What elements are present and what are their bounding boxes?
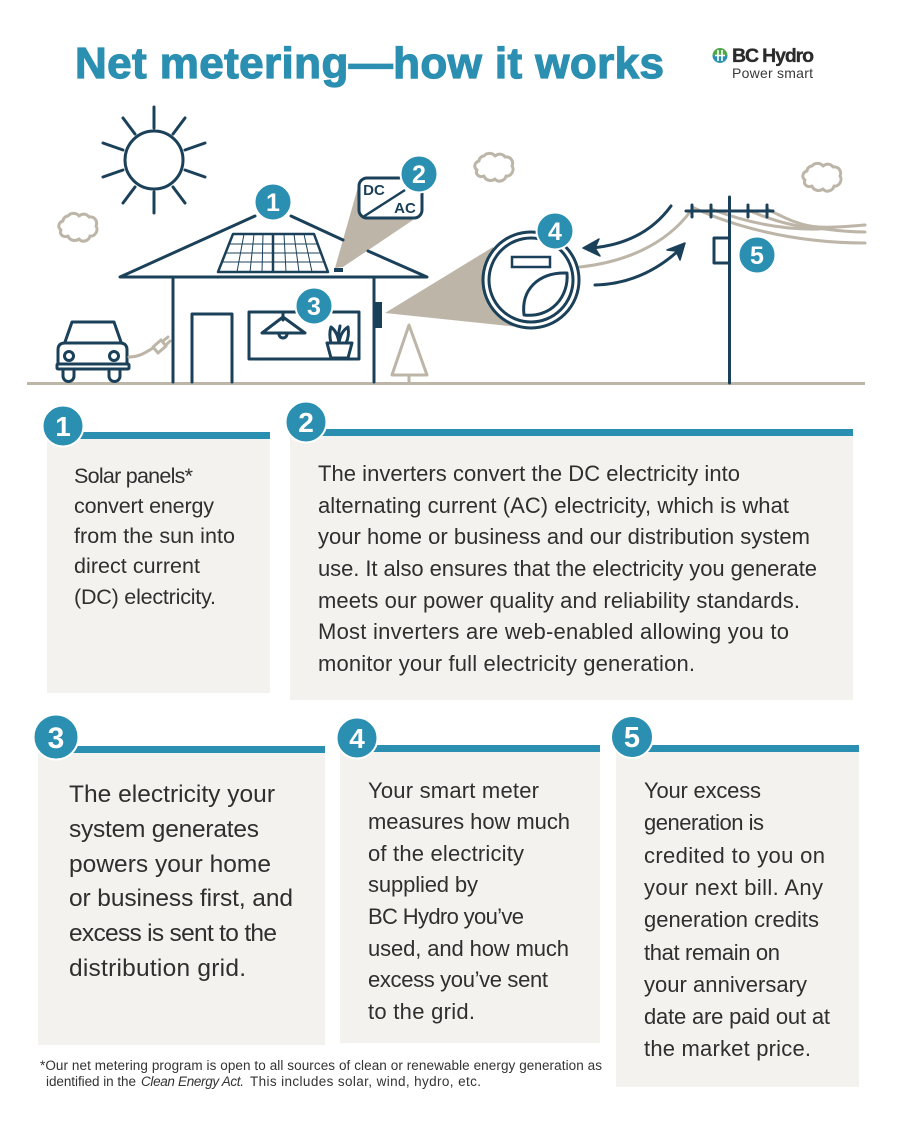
icon: solar panel — [218, 234, 328, 272]
step 2 text: The inverters convert the DC electricity into — [318, 461, 740, 486]
icon: DC to AC inverter: AC — [394, 200, 416, 217]
step 3 text — [69, 781, 293, 982]
step 3 text: distribution grid. — [69, 955, 246, 982]
icon: left cloud — [59, 213, 97, 241]
icon: house — [120, 216, 427, 382]
step 2 text: meets our power quality and reliability standards. — [318, 588, 800, 613]
icon: tree — [392, 325, 427, 383]
step 4 text: of the electricity — [368, 841, 524, 866]
panel: step 3 — [34, 714, 325, 1045]
logo: BC Hydro Power smart — [712, 45, 814, 81]
panel: step 5 — [611, 716, 859, 1087]
step 5 text: the market price. — [644, 1036, 811, 1061]
ground line — [27, 382, 865, 385]
badge 1 — [254, 184, 292, 220]
step 5 text: your anniversary — [644, 972, 807, 997]
step 4 text: excess you’ve sent — [368, 967, 548, 992]
step 2 text: use. It also ensures that the electricity you generate — [318, 556, 817, 581]
icon: rooftop inverter — [334, 268, 343, 272]
step 3 text: powers your home — [69, 851, 271, 878]
icon: charging cable and plug — [129, 337, 170, 357]
icon: beige wire to meter — [580, 212, 690, 267]
step 1 text: convert energy — [74, 494, 214, 518]
panel: step 3: 3 — [48, 722, 64, 755]
badge 2: 2 — [412, 161, 426, 189]
footnote — [40, 1058, 602, 1089]
step 5 text: credited to you on — [644, 843, 825, 868]
badge 2 — [400, 156, 438, 192]
illustration: house, meter and power pole — [27, 107, 865, 384]
icon: DC to AC inverter: DC — [363, 182, 385, 199]
badge 4 — [536, 212, 574, 250]
panel: step 2 — [286, 402, 853, 700]
icon: DC to AC inverter — [359, 178, 422, 218]
footnote: This includes solar, wind, hydro, etc. — [250, 1074, 481, 1089]
icon: sun — [103, 107, 205, 213]
panel: step 4: 4 — [349, 723, 365, 754]
step 3 text: excess is sent to the — [69, 920, 277, 947]
step 2 text — [318, 461, 817, 676]
step 2 text: Most inverters are web-enabled allowing you to — [318, 619, 789, 644]
step 2 text: monitor your full electricity generation. — [318, 651, 695, 676]
step 5 text: that remain on — [644, 940, 780, 965]
badge 3 — [296, 288, 332, 324]
step 3 text: or business first, and — [69, 885, 293, 912]
icon: power pole — [686, 197, 773, 383]
step 4 text: supplied by — [368, 872, 478, 897]
panel: step 2: 2 — [298, 407, 314, 438]
step 4 text: measures how much — [368, 809, 570, 834]
icon: smart meter — [483, 232, 579, 328]
step 1 text — [74, 464, 235, 609]
step 5 text: Your excess — [644, 778, 761, 803]
badge 5: 5 — [750, 242, 764, 270]
arrow: from meter to pole — [595, 243, 685, 285]
step 5 text: date are paid out at — [644, 1004, 830, 1029]
icon: power lines — [692, 207, 865, 243]
logo: BC Hydro Power smart: BC Hydro — [732, 45, 814, 67]
icon: plant — [327, 326, 352, 358]
step 3 text: system generates — [69, 816, 259, 843]
icon: wall-mounted meter box — [374, 302, 382, 328]
step 4 text: to the grid. — [368, 999, 475, 1024]
icon: middle cloud — [475, 153, 513, 181]
panel: step 5: 5 — [624, 722, 640, 754]
step 4 text: used, and how much — [368, 936, 569, 961]
panel: step 4 — [336, 718, 600, 1043]
footnote: identified in the — [46, 1074, 136, 1089]
icon: lamp — [262, 312, 305, 338]
step 5 text — [644, 778, 830, 1061]
arrow: from pole to meter — [583, 206, 671, 256]
badge 1: 1 — [266, 189, 280, 217]
step 1 text: Solar panels* — [74, 464, 194, 488]
panel: step 1: 1 — [55, 411, 71, 442]
title: Net metering—how it works — [75, 39, 664, 88]
step 1 text: from the sun into — [74, 524, 235, 548]
step 5 text: generation is — [644, 810, 764, 835]
badge 4: 4 — [548, 218, 562, 246]
badge 3: 3 — [307, 293, 321, 321]
icon: cone to meter — [385, 247, 519, 327]
panel: step 1 — [42, 406, 270, 693]
logo: BC Hydro Power smart: Power smart — [732, 65, 813, 81]
step 2 text: alternating current (AC) electricity, which is what — [318, 493, 789, 518]
icon: car — [57, 322, 129, 382]
step 2 text: your home or business and our distribution system — [318, 524, 810, 549]
step 1 text: direct current — [74, 554, 200, 578]
step 4 text — [368, 778, 570, 1024]
step 4 text: BC Hydro you’ve — [368, 904, 524, 929]
footnote: Clean Energy Act. — [141, 1074, 244, 1089]
badge 5 — [738, 236, 776, 274]
icon: cone to inverter — [335, 187, 413, 268]
step 5 text: your next bill. Any — [644, 875, 823, 900]
step 3 text: The electricity your — [69, 781, 275, 808]
step 5 text: generation credits — [644, 907, 819, 932]
step 4 text: Your smart meter — [368, 778, 539, 803]
icon: right cloud — [803, 163, 841, 191]
step 1 text: (DC) electricity. — [74, 585, 216, 609]
footnote: *Our net metering program is open to all sources of clean or renewable energy generation as — [40, 1058, 602, 1073]
